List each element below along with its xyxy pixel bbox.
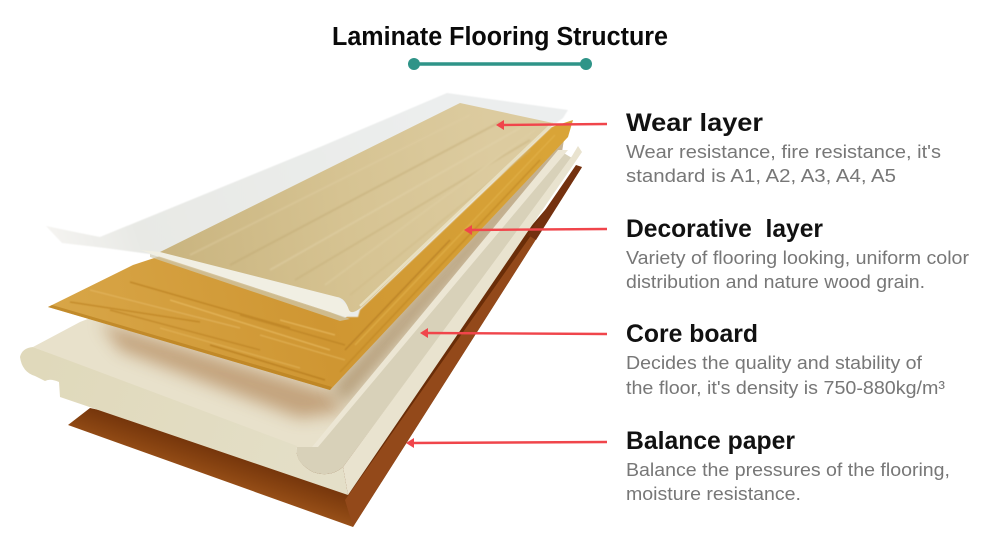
decorative layer	[48, 120, 573, 390]
text block: wear layer: standard is A1, A2, A3, A4, A5	[626, 165, 896, 186]
groove ridge	[312, 150, 568, 447]
arrow: decorative layer	[464, 225, 607, 235]
text block: balance paper	[626, 427, 950, 504]
arrow: wear layer	[496, 120, 607, 130]
core board top face shadow	[100, 120, 573, 418]
arrow: balance paper	[406, 438, 607, 448]
title: Laminate Flooring Structure	[332, 23, 668, 51]
core board front face	[20, 347, 348, 495]
text block: wear layer	[626, 109, 941, 186]
wear layer film	[46, 93, 568, 321]
text block: wear layer: Wear resistance, fire resistance, it's	[626, 141, 941, 162]
text block: decorative layer: distribution and nature wood grain.	[626, 271, 925, 292]
lip strip	[343, 146, 582, 495]
text block: balance paper: Balance paper	[626, 427, 795, 455]
groove channel	[297, 152, 572, 474]
balance paper layer	[68, 165, 582, 527]
text block: core board: the floor, it's density is 750-880kg/m³	[626, 377, 945, 398]
text block: wear layer: Wear layer	[626, 109, 763, 137]
flooring layers illustration	[20, 93, 582, 527]
core board layer	[20, 120, 582, 495]
text block: balance paper: moisture resistance.	[626, 483, 801, 504]
text block: balance paper: Balance the pressures of the flooring,	[626, 459, 950, 480]
text block: core board	[626, 320, 945, 398]
text block: core board: Decides the quality and stability of	[626, 352, 923, 373]
arrow: core board	[420, 328, 607, 338]
text block: core board: Core board	[626, 320, 758, 348]
text block: decorative layer	[626, 215, 969, 292]
text block: decorative layer: Decorative layer	[626, 215, 823, 243]
text block: decorative layer: Variety of flooring looking, uniform color	[626, 247, 969, 268]
wear layer wood surface	[160, 103, 553, 312]
title underline with end dots	[408, 58, 592, 70]
